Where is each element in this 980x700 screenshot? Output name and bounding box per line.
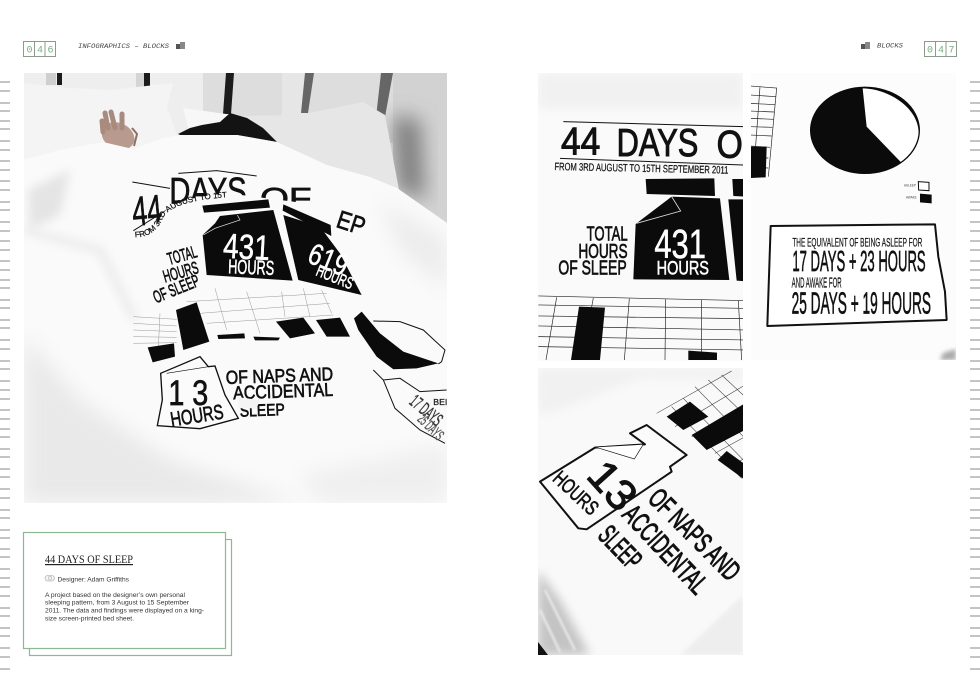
black blocks xyxy=(633,178,745,281)
total hours of sleep xyxy=(558,226,628,275)
title print xyxy=(132,170,366,238)
total hours of sleep: TOTAL xyxy=(587,223,628,245)
page number 047: 7 xyxy=(948,46,955,56)
photo: person sleeping under printed sheet xyxy=(24,73,447,503)
total hours of sleep xyxy=(153,246,199,303)
title print: FROM 3RD AUGUST TO 15TH SEPT xyxy=(135,192,227,238)
info card xyxy=(24,532,232,656)
project description: size screen-printed bed sheet. xyxy=(45,616,134,622)
equivalent box: 25 DAYS xyxy=(414,411,447,444)
of naps and accidental sleep xyxy=(226,367,333,417)
equivalent box: 17 DAYS xyxy=(406,390,447,430)
card front xyxy=(24,532,226,648)
431 hours: HOURS xyxy=(228,256,275,280)
black blocks: 431 xyxy=(654,221,706,267)
photo: title and 431 hours detail xyxy=(538,73,763,361)
of naps and accidental sleep: ACCIDENTAL xyxy=(233,379,333,403)
icon: designer badge xyxy=(45,576,54,581)
619 hours xyxy=(309,244,354,289)
black blocks: HOURS xyxy=(657,259,709,280)
title print: OF xyxy=(717,122,763,166)
project description: sleeping pattern, from 3 August to 15 September xyxy=(45,600,190,606)
bar chart grid xyxy=(133,288,333,348)
printed graphics on the sheet xyxy=(132,170,447,444)
total hours of sleep: HOURS xyxy=(161,257,201,286)
total hours of sleep: OF SLEEP xyxy=(558,258,627,280)
chart grid xyxy=(657,371,745,478)
title print: DAYS xyxy=(617,121,698,165)
wall and headboard xyxy=(24,73,447,233)
13 hours box xyxy=(157,357,238,432)
13 hours box xyxy=(540,425,687,529)
page number 047 xyxy=(924,42,956,56)
chart bars xyxy=(667,402,745,480)
total hours of sleep: HOURS xyxy=(578,241,628,263)
legend: ASLEEP xyxy=(904,183,916,187)
431 hours xyxy=(223,234,274,276)
619 hours: 619 xyxy=(303,238,353,283)
chart grid fragment xyxy=(750,86,777,178)
running head right: BLOCKS xyxy=(877,42,903,50)
legend xyxy=(904,182,932,203)
project description: 2011. The data and findings were displayed on a king- xyxy=(45,608,204,614)
page number 047: 0 xyxy=(927,46,933,56)
icon: blocks xyxy=(176,42,185,49)
page number 046: 0 xyxy=(26,46,33,56)
legend: AWAKE xyxy=(906,195,917,199)
card shadow frame xyxy=(30,540,232,656)
equivalent box: BEI xyxy=(433,397,447,407)
page header: left xyxy=(24,42,185,56)
left margin tick marks xyxy=(0,82,10,669)
right margin tick marks xyxy=(970,82,980,669)
13 hours box: 1 3 xyxy=(168,374,208,413)
of naps and accidental sleep xyxy=(598,489,740,596)
of naps and accidental sleep: OF NAPS AND xyxy=(225,363,333,388)
photo: pie chart and totals detail xyxy=(750,73,956,360)
totals box: AND AWAKE FOR xyxy=(792,275,842,291)
photo: 13 hours of naps detail xyxy=(538,368,747,655)
pie chart xyxy=(354,312,445,369)
equivalent box xyxy=(373,370,447,444)
title print: 44 xyxy=(561,120,600,164)
running head: INFOGRAPHICS – BLOCKS xyxy=(78,43,169,50)
of naps and accidental sleep: ACCIDENTAL xyxy=(617,499,714,600)
project description xyxy=(45,592,204,622)
page number 046: 6 xyxy=(48,46,54,56)
title print xyxy=(554,121,743,174)
hand xyxy=(100,110,138,148)
of naps and accidental sleep: SLEEP xyxy=(592,519,648,576)
page number 046: 4 xyxy=(37,46,43,56)
title print: OF xyxy=(260,182,312,215)
title print: EP xyxy=(333,206,369,241)
black blocks xyxy=(202,199,362,295)
total hours of sleep: OF SLEEP xyxy=(150,270,202,307)
chart bars xyxy=(571,307,717,360)
chart grid xyxy=(538,296,745,360)
13 hours box: 13 xyxy=(578,451,647,521)
of naps and accidental sleep: OF NAPS AND xyxy=(642,482,747,587)
page number 046 xyxy=(24,42,56,56)
of naps and accidental sleep: SLEEP xyxy=(239,400,285,421)
project description: A project based on the designer’s own personal xyxy=(45,592,185,599)
13 hours box: HOURS xyxy=(169,401,225,432)
page header: right xyxy=(861,42,956,56)
431 hours: 431 xyxy=(222,227,271,268)
icon: blocks right xyxy=(861,42,870,49)
619 hours: HOURS xyxy=(313,261,356,293)
title print: 44 xyxy=(130,186,164,235)
page number 047: 4 xyxy=(938,46,944,56)
title print: FROM 3RD AUGUST TO 15TH SEPTEMBER 2011 xyxy=(554,161,729,177)
title print: DAYS xyxy=(169,169,247,211)
designer credit: Designer: Adam Griffiths xyxy=(58,576,129,584)
hair xyxy=(178,113,277,142)
right pillow xyxy=(223,102,399,190)
totals box xyxy=(767,224,947,326)
card title: 44 DAYS OF SLEEP xyxy=(45,552,133,566)
left pillow xyxy=(136,86,150,88)
bar chart bars xyxy=(148,302,350,362)
13 hours box: HOURS xyxy=(548,467,603,520)
pie chart xyxy=(811,87,919,173)
total hours of sleep: TOTAL xyxy=(165,241,199,269)
duvet xyxy=(23,135,447,503)
